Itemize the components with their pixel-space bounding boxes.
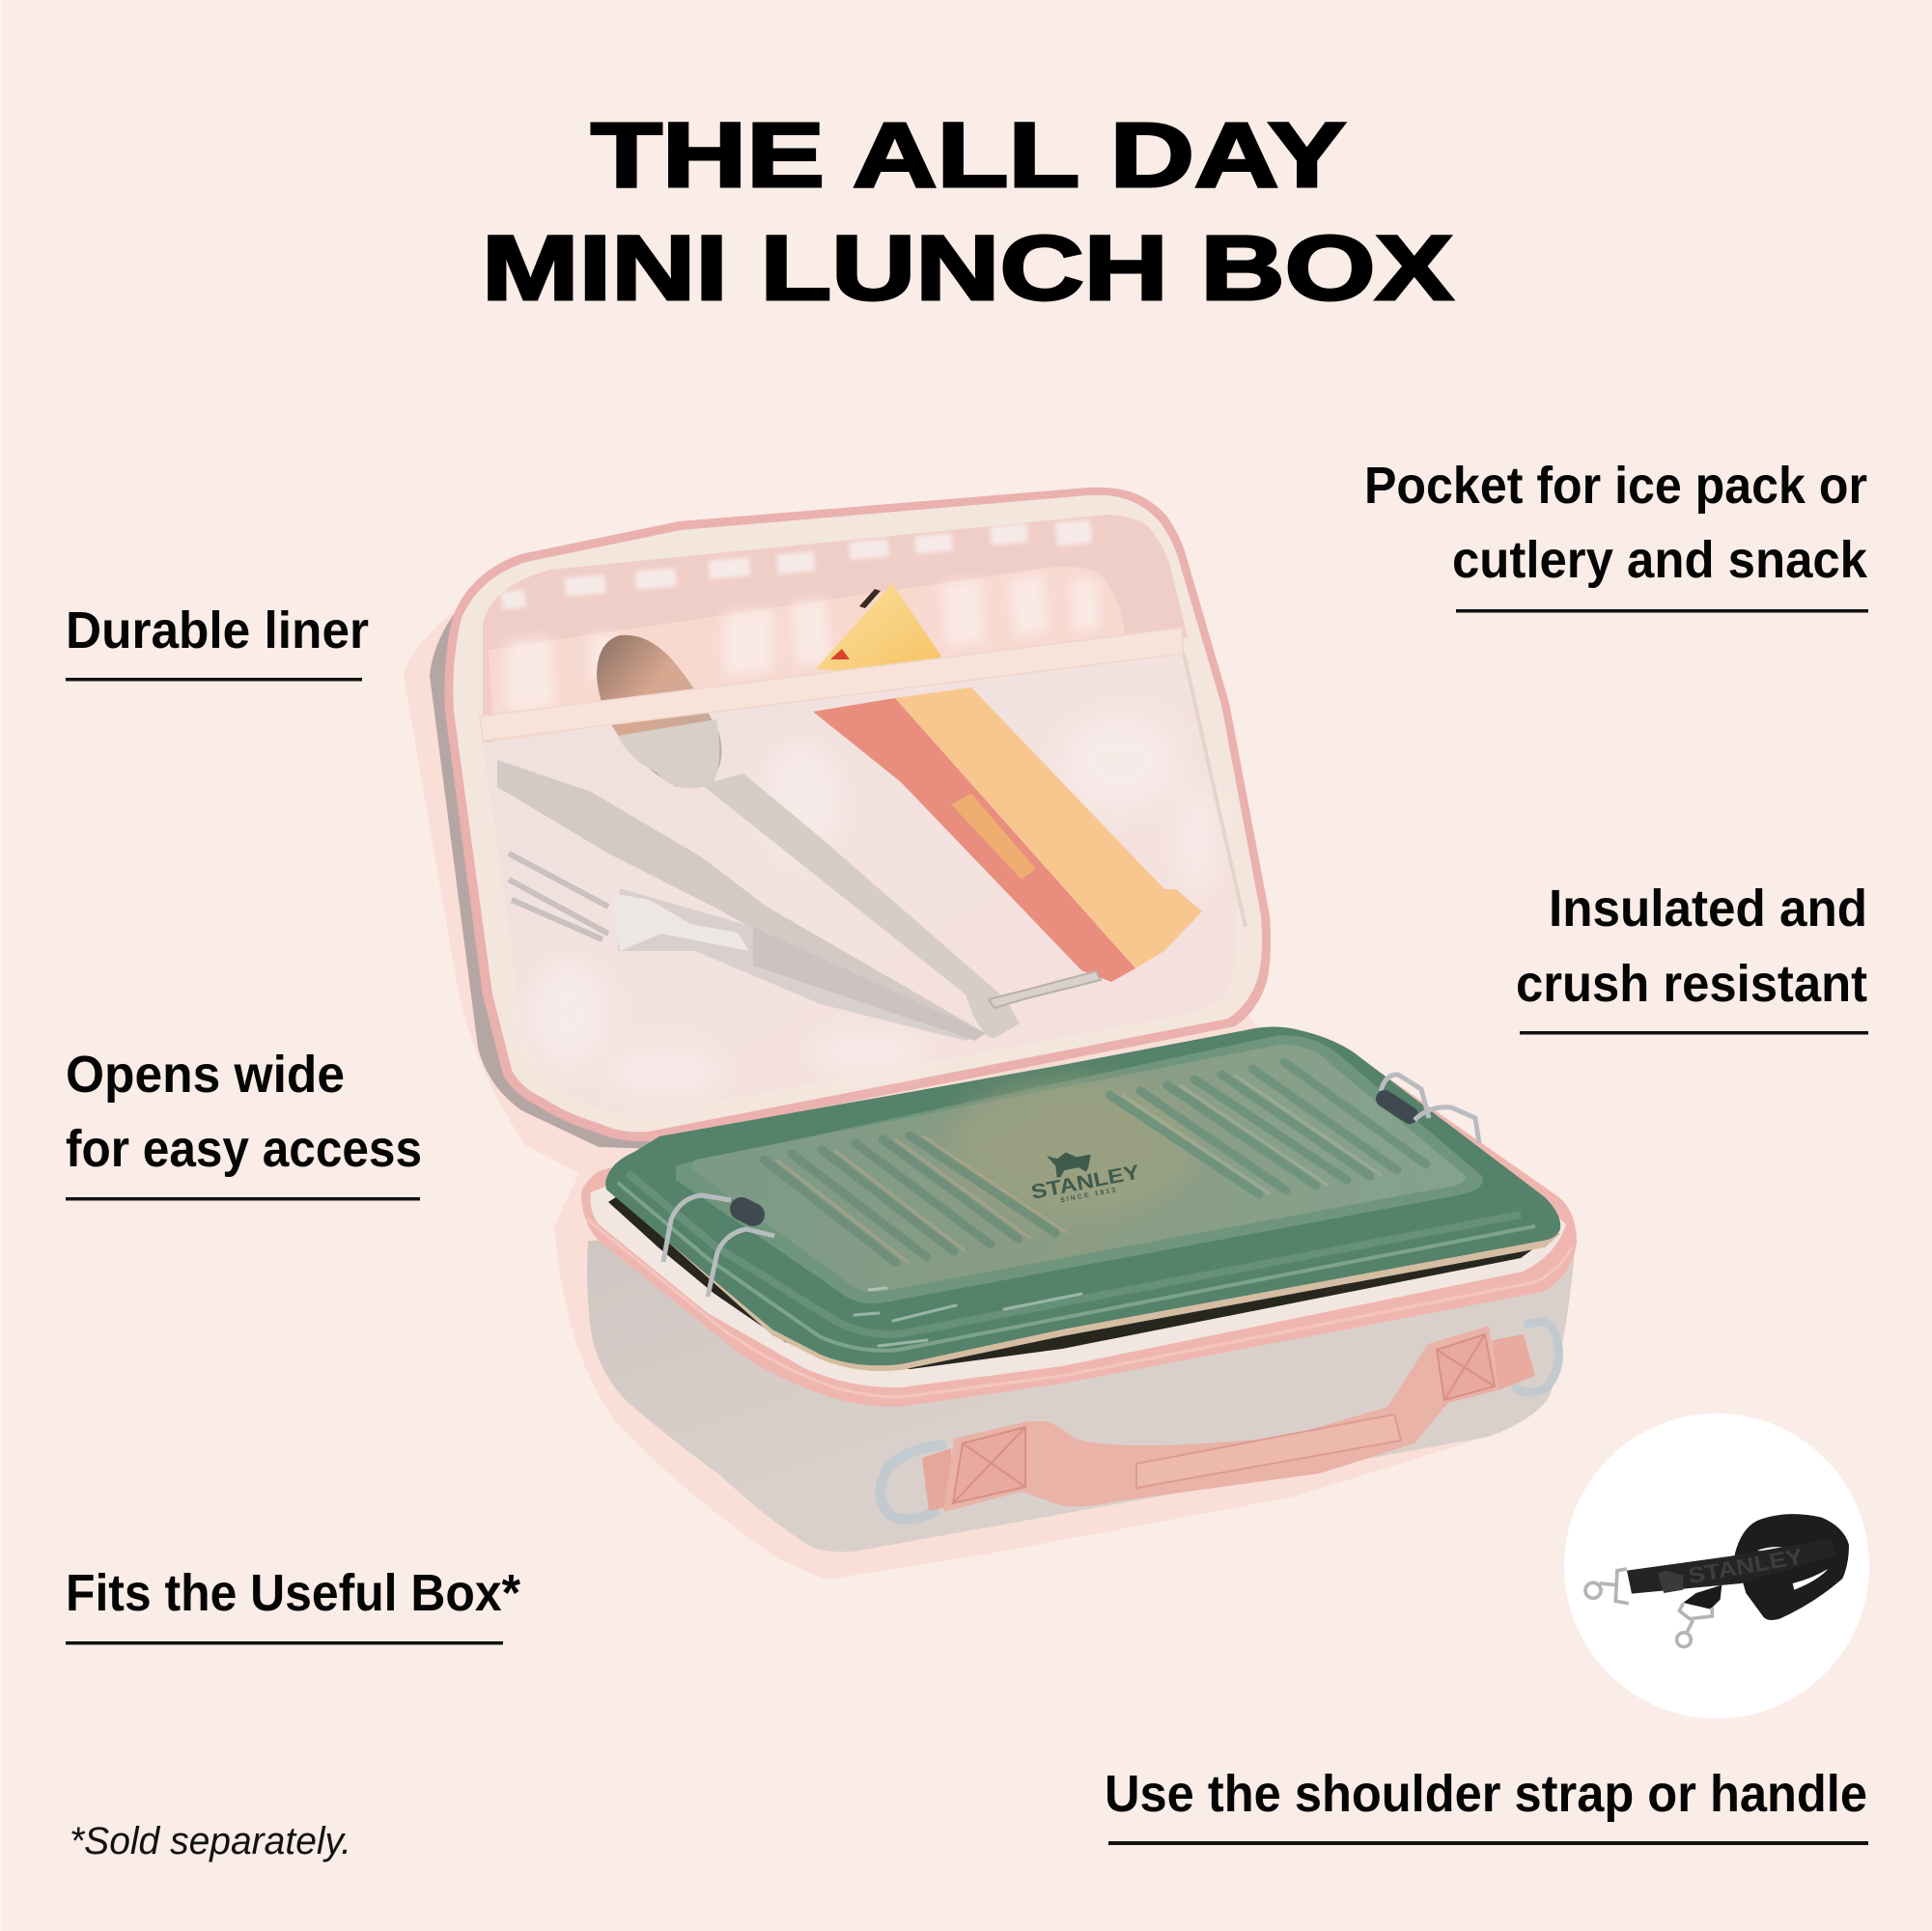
strap woven wordmark: STANLEY [1686,1543,1805,1588]
lid shoulder [676,1035,1483,1303]
zipper rim [581,1052,1577,1407]
right d-ring [1492,1322,1558,1392]
strap loop solid [1735,1514,1849,1620]
metal box tan layer [618,1081,1560,1371]
lid ridges right [1109,1062,1426,1194]
shoulder strap [1585,1514,1849,1647]
label: insulated: crush resistant [1516,955,1867,1013]
lid ridges left [764,1135,1055,1263]
right latch [1381,1075,1479,1143]
logo tagline: SINCE 1913 [1060,1187,1116,1204]
loop white gap two [1793,1569,1828,1590]
dark interior [608,1062,1549,1369]
green metal lid [605,1027,1560,1365]
ring tab [922,1448,951,1511]
left d-ring [881,1445,951,1520]
left clasp [1585,1569,1629,1604]
label: pocket: Pocket for ice pack or [1364,457,1867,515]
label: fits the useful box [66,1564,520,1645]
liner pattern row [501,519,1092,610]
wrapper yellow body [895,687,1202,968]
title [482,104,1453,320]
lid top panel [692,1045,1466,1292]
strap front band [1627,1538,1836,1594]
label: shoulder strap: Use the shoulder strap or handle [1105,1765,1867,1823]
fork handle [753,927,985,1041]
white circle [1564,1413,1869,1719]
lunch box open lid [430,488,1271,1149]
label: insulated: Insulated and [1549,880,1867,938]
carabiner [989,971,1101,1008]
label: opens wide [66,1046,422,1201]
label: fits the useful box: Fits the Useful Box* [66,1564,520,1622]
product shadow [404,579,1502,1580]
lid rim [605,1027,1560,1365]
shoulder strap inset [1564,1413,1869,1719]
wrapper label [951,794,1036,880]
title line one: THE ALL DAY [591,104,1346,207]
logo bear [1047,1148,1094,1179]
footnote: *Sold separately. [70,1820,351,1862]
zipper teeth seam [586,1218,1572,1397]
pocket band [480,628,1184,741]
lid grey outer side [430,614,657,1149]
base body [587,1226,1574,1552]
strap logo mark [1658,1571,1683,1593]
fork tines [509,854,608,939]
lower clasp [1677,1604,1712,1647]
fork [509,854,985,1041]
label: durable liner: Durable liner [66,602,369,659]
lid rim gloss stripes [618,1183,1535,1351]
strap lower tab [1683,1585,1722,1609]
inner card panel [489,567,1124,743]
logo word: STANLEY [1029,1161,1141,1204]
stanley logo [1025,1139,1142,1210]
spoon handle [702,773,1020,1038]
wrapper red edge [813,698,1135,982]
label: opens wide: Opens wide [66,1046,345,1104]
label: pocket [1364,457,1868,612]
card panel spots [507,574,1101,714]
spoon [597,635,1020,1038]
lid cream piping [453,495,1262,1132]
label: shoulder strap [1105,1765,1868,1845]
lid liner upper pink [483,515,1188,743]
lunch box base [581,1027,1577,1552]
left edge light strip [0,0,3,1931]
fork neck highlight [611,893,749,951]
knife [497,760,989,1035]
handle strap [943,1326,1498,1512]
ring [881,1445,941,1520]
lid zipper edge [444,488,1271,1141]
wrapper top [816,583,941,676]
left latch [663,1195,774,1297]
right stitched patch [1437,1334,1495,1400]
spoon neck under mesh [618,719,719,788]
label: insulated [1516,880,1868,1035]
ring [1516,1322,1558,1392]
title line two: MINI LUNCH BOX [482,217,1453,320]
left stitched patch [953,1427,1025,1503]
lid warm reflection [946,1081,1197,1217]
label: pocket: cutlery and snack [1452,531,1868,589]
snack bar [813,583,1202,982]
grip stitched panel [1136,1414,1401,1488]
label: opens wide: for easy access [66,1120,422,1178]
spoon bowl [597,635,721,787]
lid right inner seam [1184,654,1246,927]
ring tab [1492,1334,1535,1390]
lid gloss highlights [854,1288,1081,1346]
mesh blotches [531,714,1217,1096]
fork shaded area [618,888,985,1041]
mesh pocket [483,649,1236,1115]
strap body [943,1326,1498,1512]
loop white gap one [1757,1547,1784,1551]
cream piping [591,1062,1566,1387]
